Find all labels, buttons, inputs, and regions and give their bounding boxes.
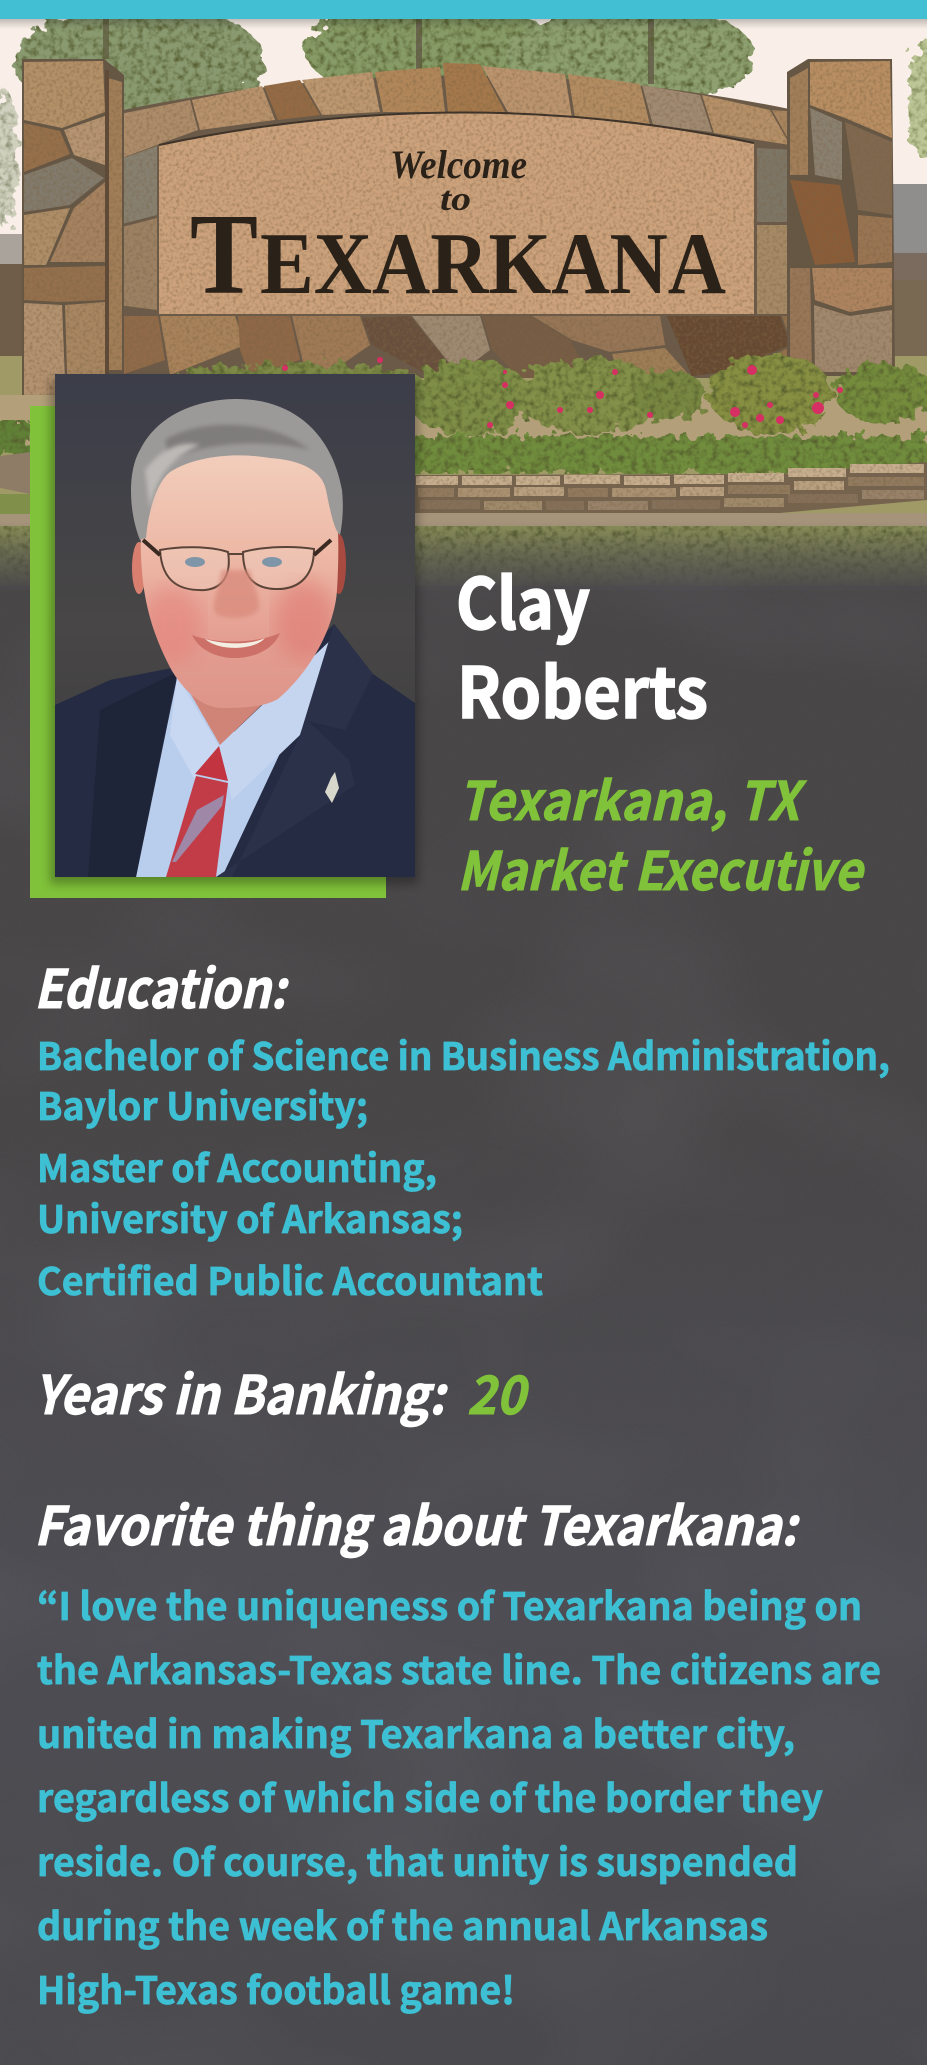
portrait photo <box>50 374 418 884</box>
education list: Baylor University; <box>37 1076 368 1131</box>
sign text: Texarkana <box>190 191 726 319</box>
dirt and grass <box>0 494 927 586</box>
suit <box>55 624 415 877</box>
wall body <box>118 76 799 378</box>
location and title: Market Executive <box>457 830 866 906</box>
location and title: Texarkana, TX <box>458 760 807 836</box>
tie <box>166 746 228 877</box>
trees behind sign <box>0 0 927 230</box>
hair <box>131 399 343 540</box>
education list: Bachelor of Science in Business Administration, <box>37 1026 890 1081</box>
years in banking: 20 <box>467 1354 530 1430</box>
houses and fences <box>0 184 927 526</box>
location and title <box>457 760 866 906</box>
name <box>456 549 708 739</box>
side wall stones <box>118 146 798 314</box>
face <box>140 455 338 708</box>
quote: High-Texas football game! <box>37 1960 515 2015</box>
sign text: Texarkana: T <box>190 191 258 319</box>
sign text: Welcome to: Welcome <box>390 142 527 187</box>
quote: the Arkansas-Texas state line. The citizens are <box>37 1640 881 1695</box>
low stone wall <box>0 452 927 513</box>
neck <box>190 694 262 745</box>
flower bushes <box>0 353 927 445</box>
right collar <box>219 636 335 800</box>
backdrop <box>55 374 415 705</box>
quote: regardless of which side of the border they <box>37 1768 823 1823</box>
top teal bar <box>0 0 927 29</box>
quote: “I love the uniqueness of Texarkana being on <box>37 1576 862 1631</box>
green accent block behind portrait <box>30 406 386 898</box>
left collar <box>170 676 219 780</box>
sign text: Welcome to <box>390 142 527 218</box>
lapel pin <box>325 772 339 803</box>
lower band stones <box>118 316 799 378</box>
shirt <box>136 636 335 877</box>
left lapel <box>88 672 177 877</box>
sky <box>0 19 927 349</box>
left pillar <box>22 59 124 405</box>
right lapel <box>216 636 335 877</box>
education list: University of Arkansas; <box>37 1189 463 1244</box>
nose <box>214 570 259 618</box>
name: Roberts <box>457 638 708 739</box>
sign panel <box>159 112 754 314</box>
name: Clay <box>456 549 590 650</box>
favorite thing heading: Favorite thing about Texarkana: <box>34 1485 800 1561</box>
eyes <box>185 557 282 567</box>
paper texture overlay <box>21 779 706 1319</box>
education heading: Education: <box>34 948 289 1024</box>
arch stones <box>120 63 799 158</box>
quote: reside. Of course, that unity is suspended <box>37 1832 798 1887</box>
sign text: Welcome to: to <box>440 181 471 218</box>
education list: Master of Accounting, <box>37 1138 437 1193</box>
glasses <box>143 540 331 590</box>
juniper band <box>0 420 927 474</box>
right pillar <box>787 59 895 376</box>
header photo: Welcome to Texarkana sign <box>0 0 927 586</box>
mouth <box>192 633 280 658</box>
years in banking: Years in Banking: <box>34 1354 448 1430</box>
education list <box>37 1026 890 1306</box>
quote <box>37 1576 881 2015</box>
quote: during the week of the annual Arkansas <box>37 1896 768 1951</box>
education list: Certified Public Accountant <box>37 1251 543 1306</box>
quote: united in making Texarkana a better city, <box>37 1704 795 1759</box>
sign text: Texarkana: EXARKANA <box>260 216 726 313</box>
fade from photo into dark texture <box>0 522 927 590</box>
ears <box>132 542 144 594</box>
stone monument <box>22 59 895 405</box>
